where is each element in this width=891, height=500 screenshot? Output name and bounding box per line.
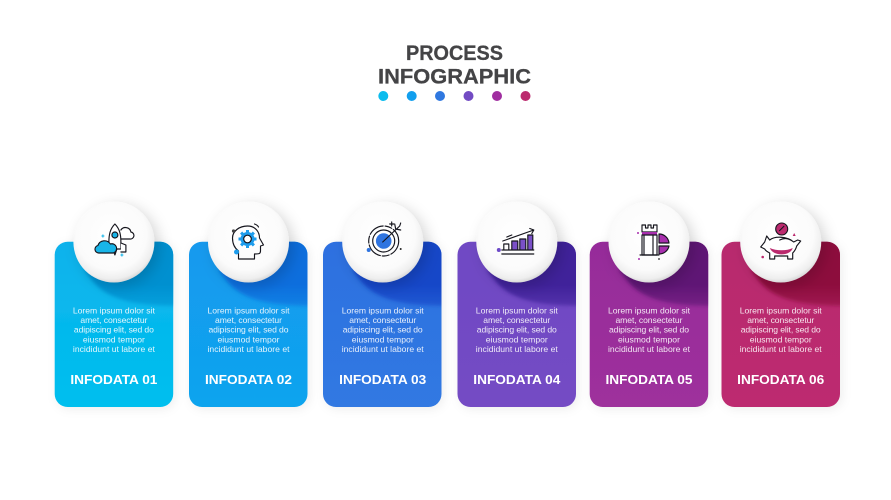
body text <box>73 306 156 354</box>
body text: amet, consectetur <box>80 315 148 325</box>
body text: eiusmod tempor <box>83 334 145 344</box>
body text <box>208 306 290 354</box>
panel: infodata 02 <box>189 202 314 407</box>
label: INFODATA 06 <box>737 372 824 387</box>
label: INFODATA 02 <box>205 372 292 387</box>
body text: eiusmod tempor <box>486 334 548 344</box>
icon: chess rook and pie chart <box>637 225 669 260</box>
title: INFOGRAPHIC <box>378 64 531 88</box>
icon: bar chart with arrow <box>497 228 534 254</box>
icon: head with gear <box>232 224 264 259</box>
body text <box>608 306 691 354</box>
body text: adipiscing elit, sed do <box>74 325 154 335</box>
body text <box>476 306 558 354</box>
body text: incididunt ut labore et <box>476 344 558 354</box>
panel: infodata 06 <box>722 202 846 407</box>
body text: eiusmod tempor <box>618 334 680 344</box>
body text: amet, consectetur <box>483 315 550 325</box>
body text: amet, consectetur <box>349 315 416 325</box>
icon: rocket and clouds <box>95 224 134 256</box>
panel: infodata 05 <box>590 202 715 407</box>
body text: adipiscing elit, sed do <box>208 325 289 335</box>
body text: Lorem ipsum dolor sit <box>73 306 156 316</box>
title <box>378 41 531 88</box>
body text: incididunt ut labore et <box>73 344 156 354</box>
body text: incididunt ut labore et <box>740 344 822 354</box>
body text <box>740 306 822 354</box>
body text: adipiscing elit, sed do <box>741 325 821 335</box>
body text: adipiscing elit, sed do <box>477 325 557 335</box>
body text: amet, consectetur <box>747 315 814 325</box>
body text: incididunt ut labore et <box>608 344 691 354</box>
title colour dots <box>378 91 530 101</box>
body text <box>342 306 424 354</box>
body text: eiusmod tempor <box>352 334 414 344</box>
body text: Lorem ipsum dolor sit <box>608 306 691 316</box>
body text: amet, consectetur <box>616 315 683 325</box>
panel: infodata 01 <box>55 202 180 407</box>
panel: infodata 03 <box>323 202 448 407</box>
title: PROCESS <box>406 41 503 65</box>
label: INFODATA 05 <box>606 372 693 387</box>
body text: Lorem ipsum dolor sit <box>342 306 424 316</box>
body text: adipiscing elit, sed do <box>343 325 423 335</box>
body text: eiusmod tempor <box>750 334 812 344</box>
body text: Lorem ipsum dolor sit <box>476 306 558 316</box>
label: INFODATA 04 <box>473 372 561 387</box>
body text: amet, consectetur <box>215 315 282 325</box>
body text: eiusmod tempor <box>218 334 280 344</box>
panel: infodata 04 <box>458 202 582 407</box>
body text: Lorem ipsum dolor sit <box>740 306 822 316</box>
body text: adipiscing elit, sed do <box>609 325 689 335</box>
body text: Lorem ipsum dolor sit <box>208 306 290 316</box>
label: INFODATA 03 <box>339 372 426 387</box>
body text: incididunt ut labore et <box>208 344 290 354</box>
body text: incididunt ut labore et <box>342 344 424 354</box>
icon: piggy bank with coin <box>761 223 801 259</box>
label: INFODATA 01 <box>70 372 157 387</box>
icon: target with arrow <box>367 222 402 256</box>
